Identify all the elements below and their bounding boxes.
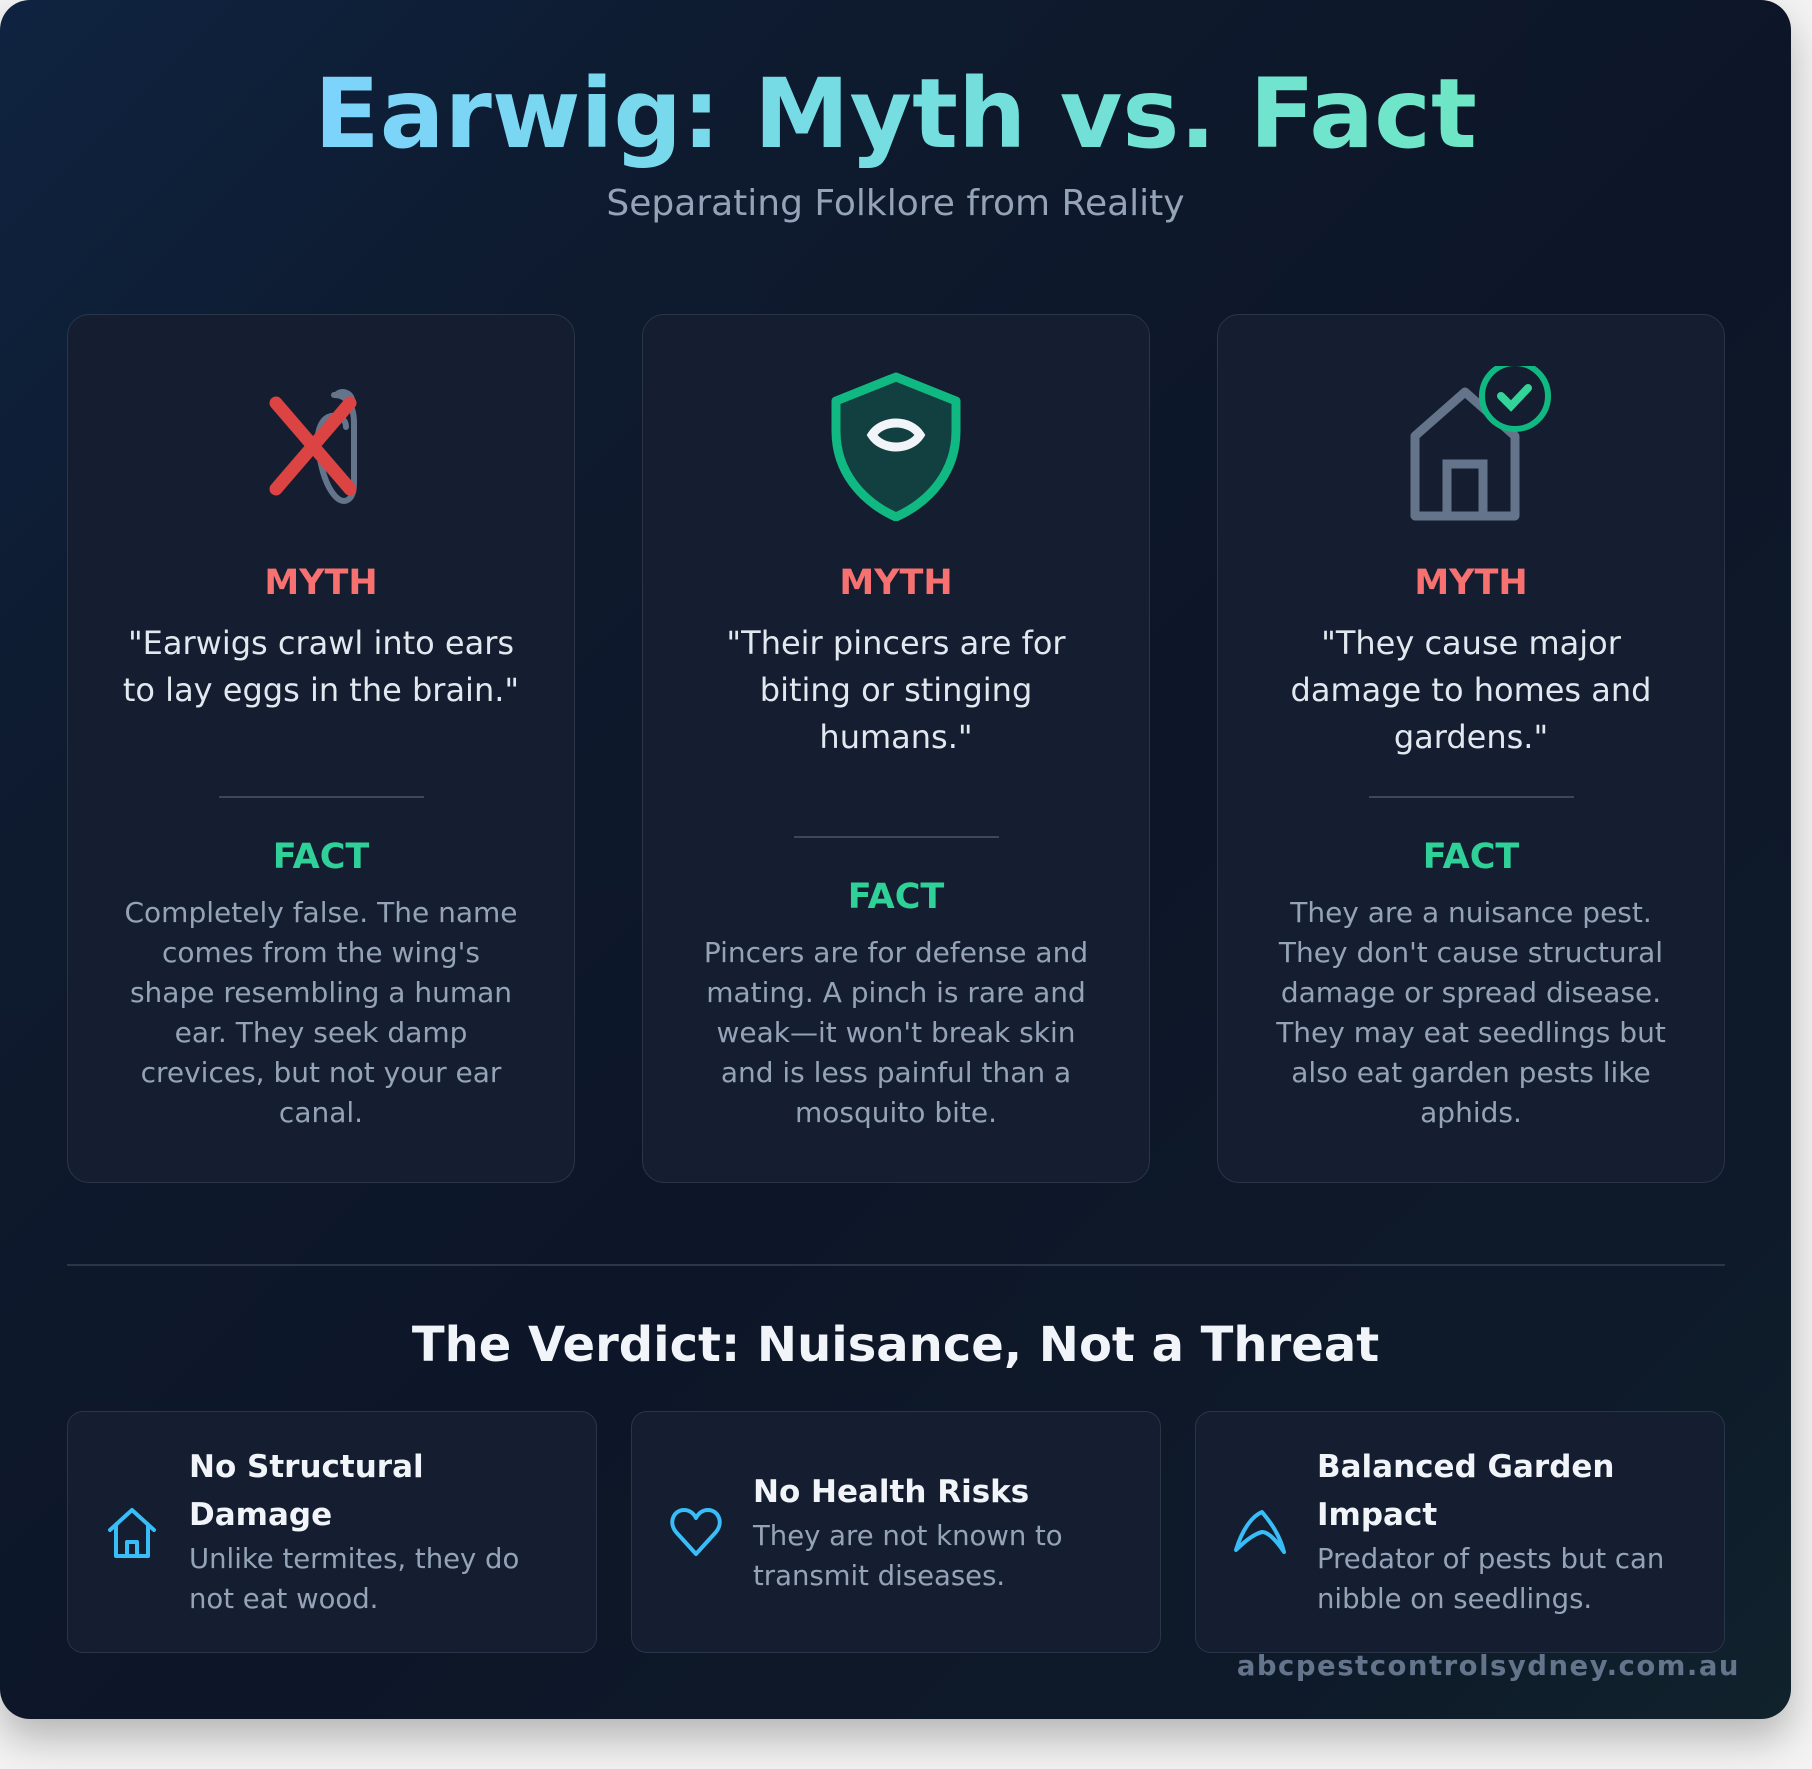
myth label: MYTH xyxy=(1414,563,1528,603)
myth label: MYTH xyxy=(839,563,953,603)
text: balanced garden impact: Balanced Garden Impact xyxy=(1317,1449,1614,1533)
icon: house with check xyxy=(1410,366,1551,520)
fact label: FACT xyxy=(1423,836,1519,876)
subtitle: Separating Folklore from Reality xyxy=(606,183,1185,224)
myth quote: "Earwigs crawl into ears to lay eggs in the brain." xyxy=(123,624,519,709)
text: no health risks: No Health Risks xyxy=(753,1474,1029,1510)
myth label: MYTH xyxy=(264,563,378,603)
myth quote: "Their pincers are for biting or stinging humans." xyxy=(726,624,1066,756)
text: balanced garden impact xyxy=(1317,1449,1664,1615)
panel: no health risks xyxy=(631,1411,1161,1653)
icon: crossed ear xyxy=(270,389,357,504)
panel: card 1 ear myth xyxy=(67,314,575,1183)
text: no health risks xyxy=(752,1474,1063,1592)
icon: shield xyxy=(832,372,960,521)
verdict heading: The Verdict: Nuisance, Not a Threat xyxy=(412,1317,1379,1373)
panel: balanced garden impact xyxy=(1195,1411,1725,1653)
fact text: Pincers are for defense and mating. A pinch is rare and weak—it won't break skin and is less painful than a mosquito bite. xyxy=(704,936,1088,1128)
text: no structural damage: Unlike termites, they do not eat wood. xyxy=(189,1543,519,1615)
text: no structural damage xyxy=(189,1449,519,1615)
fact label: FACT xyxy=(273,836,369,876)
fact label: FACT xyxy=(848,876,944,916)
fact text: Completely false. The name comes from the wing's shape resembling a human ear. They seek damp crevices, but not your ear canal. xyxy=(124,896,517,1128)
panel: card 2 pincers myth xyxy=(642,314,1150,1183)
title: Earwig: Myth vs. Fact xyxy=(314,58,1477,170)
panel: card 3 damage myth xyxy=(1217,314,1725,1183)
icon: heart xyxy=(670,1508,722,1556)
icon: house xyxy=(108,1508,156,1558)
footer url: abcpestcontrolsydney.com.au xyxy=(1237,1650,1740,1682)
panel: no structural damage xyxy=(67,1411,597,1653)
text: balanced garden impact: Predator of pests but can nibble on seedlings. xyxy=(1317,1543,1664,1615)
text: no health risks: They are not known to transmit diseases. xyxy=(753,1520,1063,1592)
myth quote: "They cause major damage to homes and gardens." xyxy=(1291,624,1651,756)
text: no structural damage: No Structural Damage xyxy=(189,1449,424,1533)
icon: leaf arc xyxy=(1234,1510,1286,1554)
fact text: They are a nuisance pest. They don't cause structural damage or spread disease. They may eat seedlings but also eat garden pests like aphids. xyxy=(1276,896,1666,1128)
